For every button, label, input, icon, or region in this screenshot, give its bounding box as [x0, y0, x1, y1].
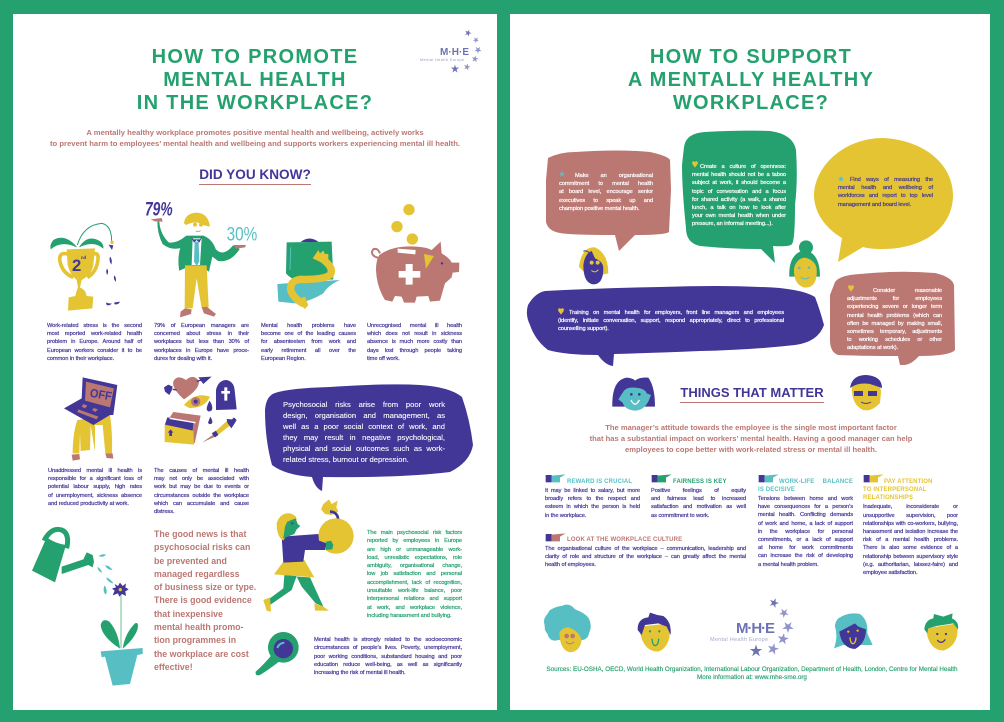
heading: fairness: FAIRNESS IS KEY [673, 479, 727, 485]
logo: MHE small: M·H·E [440, 47, 469, 58]
icon: face yellow green hair [924, 613, 958, 651]
text: main psychosocial risk factors: reported by employees in Europe [367, 538, 462, 544]
title [628, 46, 874, 114]
text: unrecognised mental ill health: which does not result in sickness [367, 331, 462, 337]
icon: laptop OFF on legs [64, 377, 117, 461]
text: fairness is key [651, 478, 746, 519]
icon: laptop OFF on legs: OFF [89, 386, 113, 403]
text: interpersonal relationships: relationship between supervisory style [863, 554, 958, 560]
title: HOW TO SUPPORT [650, 46, 852, 68]
text: manager's attitude [590, 422, 912, 454]
text: socioeconomic circumstances [314, 636, 462, 676]
icon: pointing hand pay attention [864, 474, 884, 482]
text: good news: There is good evidence [154, 595, 252, 605]
icon: pointing hand fairness [652, 474, 672, 482]
text: good news: that inexpensive [154, 609, 223, 619]
callout text: psychosocial risks: they may result in negative psychological, [283, 432, 445, 442]
text: causes of mental ill health: distress. [154, 509, 174, 515]
panel: how to support a mentally healthy workplace [510, 14, 990, 710]
title: A MENTALLY HEALTHY [628, 69, 874, 91]
text: manager's attitude: employees to cope better with work-related stress or mental ill health. [625, 444, 877, 454]
text: main psychosocial risk factors: interpersonal relations and support [367, 596, 462, 602]
text: 79% of managers [154, 322, 250, 362]
callout text: psychosocial risks: related stress, burnout or depression. [283, 454, 409, 464]
text: work-life balance: at home for work commitments [758, 545, 853, 551]
callout text: culture of openness: for shared activity (a walk, a shared [692, 197, 786, 203]
text: good news: effective! [154, 662, 193, 672]
text: fairness is key: satisfaction and motivation as well [651, 504, 746, 510]
text: work-life balance: mental health. Conflicting demands [758, 512, 853, 518]
callout text: reasonable adjustments: experiencing severe or longer term [847, 304, 942, 310]
text: reward is crucial: in the workplace. [545, 513, 586, 519]
text: socioeconomic circumstances: increasing the risk of mental ill health. [314, 670, 406, 676]
text: interpersonal relationships: Inadequate, inconsiderate or [863, 504, 958, 510]
text: workplace culture: clarity of role and structure of the workplace – can greatly affect the mental [545, 554, 746, 560]
callout text: culture of openness: subject at work, it should become a [692, 180, 786, 186]
text: socioeconomic circumstances: Mental health is strongly related to the socioeconomic [314, 637, 462, 643]
callout text: measuring wellbeing: management and board level. [838, 202, 911, 208]
callout text: reasonable adjustments: adaptations at work). [847, 345, 898, 351]
callout text: measuring wellbeing: workforces and report to top level [838, 193, 933, 199]
callout: rose bubble adjustments [830, 272, 955, 365]
text: work-related stress: common in their workplace. [47, 356, 114, 362]
text: absenteeism: Mental health problems have [261, 323, 356, 329]
callout text: psychosocial risks: well as a poor social context of work, and [283, 422, 445, 430]
text: good news: psychosocial risks can [154, 542, 250, 552]
icon: watering can [32, 529, 113, 595]
callout: rose bubble board level [546, 150, 671, 251]
callout text: organisational commitment: Make an organisational [575, 173, 653, 179]
text: socioeconomic circumstances: circumstances of people’s lives. Poverty, unemployment, [314, 645, 462, 651]
text: manager's attitude: that has a substantial impact on workers’ mental health. Having a good manager can help [590, 434, 912, 442]
text: interpersonal relationships: employee satisfaction. [863, 570, 918, 576]
title: WORKPLACE? [673, 92, 829, 114]
text: work-related stress: most reported work-related health [47, 331, 142, 337]
icon: briefcase carried under arm [277, 238, 340, 309]
callout text: culture of openness: Create a culture of openness: [700, 164, 786, 170]
text: main psychosocial risk factors: unsuitable work-life balance, poor [367, 588, 462, 594]
text: work-related stress [46, 322, 142, 362]
callout text: reasonable adjustments: often be managed by making small, [847, 321, 942, 327]
callout text: organisational commitment: commitment to mental health [559, 181, 653, 187]
callout text: training: Training on mental health for employers, front line managers and employees [569, 310, 784, 316]
text: causes of mental ill health: which can accumulate and cause [154, 501, 249, 507]
text: good news: mental health promo- [154, 622, 243, 632]
text: causes of mental ill health [154, 468, 250, 515]
intro text: to prevent harm to employees’ mental health and wellbeing and supports workers experiencing mental ill health. [50, 138, 460, 148]
logo: MHE large [710, 597, 796, 656]
text: causes of mental ill health: circumstances outside the workplace [154, 493, 249, 499]
text: absenteeism: early retirement all over the [261, 348, 356, 354]
callout text: psychosocial risks [282, 400, 446, 464]
text: work-life balance [758, 478, 854, 568]
text: work-life balance: of work and home, a lack of support [758, 521, 853, 527]
text: reward is crucial: esteem in which the person is held [545, 504, 640, 510]
text: good news: managed regardless [154, 569, 240, 579]
text: unrecognised mental ill health: time off work. [367, 356, 400, 362]
heading: work-life: IS DECISIVE [758, 487, 795, 493]
heading: pay attention: PAY ATTENTION [884, 479, 933, 485]
heading: culture: LOOK AT THE WORKPLACE CULTURE [567, 537, 682, 543]
text: 79% of managers: 79% of European managers are [154, 323, 249, 329]
text: interpersonal relationships: unsupportive supervision, poor [863, 513, 958, 519]
callout text: culture of openness: your own mental health when under [692, 213, 786, 219]
icon: pointing hand reward [546, 474, 566, 482]
text: main psychosocial risk factors: low job satisfaction and personal [367, 571, 462, 577]
icon: face yellow purple hair [638, 613, 671, 652]
callout text: culture of openness: mental health should not be a taboo [692, 172, 786, 178]
icon: magnifying glass [256, 632, 299, 675]
illustrations: left panel [32, 30, 482, 686]
text: good news: The good news is that [154, 529, 246, 539]
text: absenteeism: European Region. [261, 356, 306, 362]
text: unaddressed mental ill health: and reduced productivity at work. [48, 501, 129, 507]
text: unrecognised mental ill health: Unrecognised mental ill health [367, 323, 462, 329]
text: interpersonal relationships: risk of a mental health problems. [863, 537, 958, 543]
text: socioeconomic circumstances: education reduce well-being, as well as significantly [314, 662, 462, 668]
callout text: reasonable adjustments: adjustments for employees [847, 296, 942, 302]
heading: work-life: WORK-LIFE BALANCE [779, 479, 853, 485]
sources: More information at: www.mhe-sme.org [697, 674, 807, 681]
icon: face yellow with dark hair [850, 375, 882, 410]
text: unrecognised mental ill health: days lost through people taking [367, 348, 462, 354]
sources [546, 666, 958, 681]
icon: woman carrying bomb [263, 499, 354, 612]
callout text: measuring wellbeing: Find ways of measuring the [850, 177, 933, 183]
text: reward is crucial: It may be linked to salary, but more [545, 488, 640, 494]
heading: did you know: DID YOU KNOW? [199, 167, 311, 182]
text: work-life balance: commitments, or a lack of support [758, 537, 853, 543]
callout text: culture of openness: topic of conversation and a focus [692, 189, 786, 195]
text: manager's attitude: The manager’s attitude towards the employee is the single most important factor [605, 422, 897, 432]
text: 79% of managers: dures for dealing with it. [154, 356, 212, 362]
text: good news: the workplace are cost [154, 649, 249, 659]
heading: pay attention [863, 478, 933, 501]
icon: face teal afro [544, 605, 591, 652]
callout text: psychosocial risks: Psychosocial risks arise from poor work [283, 400, 445, 408]
text: interpersonal relationships: relationships with co-workers, bullying, [863, 521, 958, 527]
callout: purple bubble training [527, 286, 824, 366]
callout text: measuring wellbeing [838, 176, 934, 208]
heading: work-life [758, 478, 853, 493]
icon: pointing hand work-life [759, 474, 779, 482]
logo: MHE small: Mental Health Europe [420, 58, 464, 62]
callout text: training [558, 310, 784, 332]
icon: causes of mental illness symbols [164, 377, 237, 445]
callout: psychosocial risks bubble [265, 384, 473, 491]
text: main psychosocial risk factors: load, unrealistic expectations, role [367, 555, 462, 561]
text: good news [154, 529, 256, 672]
callout text: reasonable adjustments: sometimes temporary, adjustments [847, 329, 942, 335]
text: work-life balance: a mental health problem. [758, 562, 819, 568]
callout text: training: (identify, initiate conversation, support, respond appropriately, direct to professional [558, 318, 784, 324]
title [137, 46, 373, 114]
callout text: organisational commitment: at board level, encourage senior [559, 189, 653, 195]
callout text: culture of openness: lunch, a talk on how to look after [692, 205, 786, 211]
callout text: measuring wellbeing: mental health and wellbeing of [838, 185, 933, 191]
icon: trophy with wilting plant: nd [81, 255, 87, 260]
text: fairness is key: and fairness lead to increased [651, 496, 746, 502]
text: main psychosocial risk factors: are high or unmanageable work- [367, 547, 462, 553]
icon: manager with 79% and 30%: 30% [227, 225, 257, 246]
text: socioeconomic circumstances: poor working conditions, substandard housing and poor [314, 654, 462, 660]
intro text: A mentally healthy workplace promotes positive mental health and wellbeing, actively works [86, 128, 424, 136]
text: interpersonal relationships: (e.g. authoritarian, laissez-faire) and [863, 562, 958, 568]
logo: MHE small [420, 28, 483, 73]
icon: trophy with wilting plant: 2 [72, 256, 81, 275]
text: workplace culture [545, 536, 746, 568]
callout text: training: counselling support). [558, 326, 609, 332]
callout: green bubble openness [682, 131, 797, 263]
heading: pay attention: TO INTERPERSONAL [863, 487, 927, 493]
icon: manager with 79% and 30%: 79% [145, 199, 173, 220]
icon: pointing hand workplace culture [546, 533, 566, 541]
text: unaddressed mental ill health: Unaddressed mental ill health is [48, 468, 142, 474]
icon: manager with 79% and 30% [145, 199, 257, 317]
text: absenteeism: become one of the leading causes [261, 331, 356, 337]
title: MENTAL HEALTH [163, 69, 347, 91]
text: main psychosocial risk factors [367, 530, 462, 619]
icon: face yellow with green bun [789, 240, 820, 288]
text: fairness is key: Positive feelings of equity [651, 488, 746, 494]
callout text: psychosocial risks: physical and social outcomes such as work- [283, 444, 445, 452]
panel: how to promote mental health [13, 14, 497, 710]
icon: face teal with purple hair [612, 377, 655, 411]
text: work-life balance: Tensions between home and work [758, 496, 853, 502]
callout text: culture of openness [692, 164, 786, 227]
text: fairness is key: as commitment to work. [651, 513, 709, 519]
icon: face purple teal hair [834, 613, 873, 649]
text: interpersonal relationships: There is also some evidence of a [863, 545, 958, 551]
text: 79% of managers: concerned about stress in their [154, 331, 249, 337]
icon: face purple with yellow hair [579, 247, 608, 284]
title: IN THE WORKPLACE? [137, 92, 373, 114]
text: good news: tion programmes in [154, 635, 236, 645]
text: good news: be prevented and [154, 556, 227, 566]
text: reward is crucial [545, 478, 640, 519]
text: work-related stress: Work-related stress is the second [47, 323, 142, 329]
icon: trophy with wilting plant [50, 223, 120, 311]
text: interpersonal relationships [863, 478, 958, 576]
callout text: organisational commitment: executives to speak up and [559, 198, 653, 204]
text: absenteeism: for absenteeism from work and [261, 339, 356, 345]
heading: things that matter: THINGS THAT MATTER [680, 385, 824, 400]
text: unaddressed mental ill health [48, 468, 142, 507]
text: 79% of managers: workplaces in Europe have proce- [154, 348, 249, 354]
text: reward is crucial: broadly refers to the respect and [545, 496, 640, 502]
title: HOW TO PROMOTE [152, 46, 358, 68]
text: 79% of managers: workplaces but less than 30% of [154, 339, 249, 345]
text: work-related stress: problem in Europe. Around half of [47, 339, 142, 345]
text: main psychosocial risk factors: accomplishment, lack of recognition, [367, 580, 462, 586]
text: unrecognised mental ill health: absence is much more costly than [367, 339, 462, 345]
text: causes of mental ill health: may not only be associated with [154, 476, 249, 482]
text: main psychosocial risk factors: The main psychosocial risk factors [367, 530, 462, 536]
text: unrecognised mental ill health [366, 322, 462, 362]
illustrations: right panel [526, 130, 958, 656]
callout text: psychosocial risks: design, organisation and management, as [283, 410, 445, 420]
text: workplace culture: health of employees. [545, 562, 596, 568]
heading: pay attention: RELATIONSHIPS [863, 495, 913, 501]
callout text: reasonable adjustments: to working schedules or other [847, 337, 942, 343]
logo: MHE large: Mental Health Europe [710, 637, 768, 643]
icon: piggy bank with coins [372, 204, 459, 303]
callout: yellow bubble measuring [814, 138, 953, 262]
text: main psychosocial risk factors: ambiguity, organisational change, [367, 563, 462, 569]
text: interpersonal relationships: harassment and isolation increase the [863, 529, 958, 535]
text: good news: of business size or type. [154, 582, 256, 592]
callout text: reasonable adjustments: Consider reasonable [873, 288, 942, 294]
text: main psychosocial risk factors: including harassment and bullying. [367, 613, 452, 619]
text: absenteeism [260, 322, 356, 362]
sources: Sources: EU-OSHA, OECD, World Health Organization, International Labour Organization, Department of Health, London, Centre for Mental Health [546, 666, 958, 673]
text: workplace culture: The organisational culture of the workplace – communication, leadership and [545, 546, 746, 552]
callout text: reasonable adjustments [847, 288, 942, 351]
text: unaddressed mental ill health: potential labour supply, high rates [48, 484, 142, 490]
logo: MHE large: M·H·E [736, 620, 775, 637]
text: work-related stress: European workers consider it to be [47, 348, 142, 354]
text: causes of mental ill health: The causes of mental ill health [154, 468, 249, 474]
text: main psychosocial risk factors: at work, and workplace violence, [367, 605, 462, 611]
callout text: culture of openness: pressure, an informal meeting...). [692, 221, 773, 227]
text: unaddressed mental ill health: of unemployment, sickness absence [48, 493, 142, 499]
text: work-life balance: have consequences for a person’s [758, 504, 853, 510]
callout text: organisational commitment [559, 172, 654, 212]
text: work-life balance: can increase the risk of developing [758, 553, 853, 559]
text: work-life balance: in the workplace for personal [758, 529, 853, 535]
icon: flower in pot [101, 583, 143, 686]
heading: reward: REWARD IS CRUCIAL [567, 479, 632, 485]
callout text: reasonable adjustments: mental health problems (which can [847, 313, 942, 319]
callout text: organisational commitment: champion positive mental health. [559, 206, 639, 212]
text: unaddressed mental ill health: responsible for a significant loss of [48, 476, 142, 482]
intro text [50, 128, 460, 148]
text: causes of mental ill health: work but may be due to events or [154, 484, 249, 490]
